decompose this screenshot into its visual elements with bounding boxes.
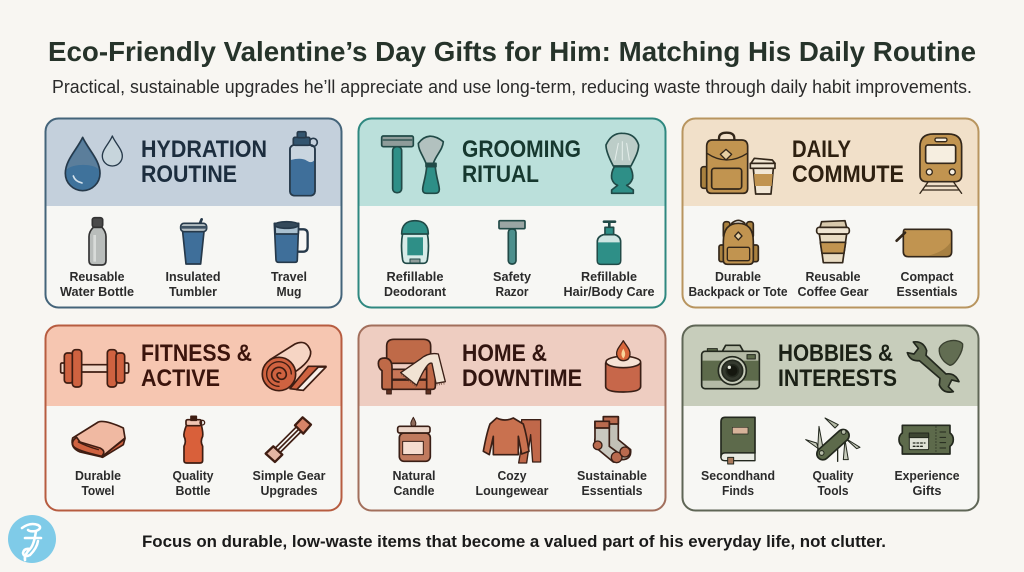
- item labels: home: Natural: [392, 468, 436, 483]
- icon: water drops: [65, 136, 122, 191]
- heading: hobbies and interests: INTERESTS: [778, 365, 897, 392]
- item labels: grooming: [384, 269, 654, 299]
- item labels: grooming: Razor: [496, 284, 528, 299]
- heading: grooming ritual: GROOMING: [462, 136, 581, 163]
- icon: coffee cup: [817, 221, 849, 263]
- panel header: hobbies: [683, 326, 978, 406]
- icon: wrench and pick: [907, 340, 963, 392]
- icon: shaving brush: [606, 133, 639, 193]
- icon: backpack and cup: [701, 133, 775, 194]
- item labels: commute: Backpack or Tote: [688, 284, 788, 299]
- icon: lit candle: [606, 341, 641, 392]
- icon: pouch: [897, 229, 952, 257]
- icon: small backpack: [719, 220, 758, 264]
- item labels: home: Candle: [394, 483, 434, 498]
- item labels: hydration: Insulated: [166, 269, 220, 284]
- item labels: grooming: Refillable: [581, 269, 637, 284]
- icon: rolled mat: [262, 342, 326, 391]
- item labels: fitness: Quality: [172, 468, 214, 483]
- item labels: home: Sustainable: [577, 468, 647, 483]
- item labels: hydration: Water Bottle: [60, 284, 134, 299]
- item labels: hydration: Reusable: [70, 269, 124, 284]
- panel header: home: [359, 326, 665, 406]
- item labels: commute: Reusable: [806, 269, 860, 284]
- icon: book: [721, 417, 755, 464]
- icon: socks: [593, 417, 631, 463]
- subtitle: Practical, sustainable upgrades he’ll appreciate and use long-term, reducing waste through daily habit improvements.: [52, 77, 972, 97]
- panel: fitness and active: [45, 325, 342, 511]
- heading: hobbies and interests: HOBBIES &: [778, 340, 893, 367]
- logo badge: [8, 515, 56, 563]
- icon: reusable water bottle: [89, 218, 106, 265]
- panel: grooming ritual: [358, 118, 666, 308]
- icon: refillable deodorant: [402, 221, 428, 263]
- heading: fitness and active: ACTIVE: [141, 365, 220, 392]
- heading: home and downtime: [462, 340, 582, 392]
- icon: experience ticket: [899, 425, 953, 454]
- item labels: hobbies: Secondhand: [701, 468, 775, 483]
- panel header: commute: [683, 119, 978, 206]
- item labels: grooming: Safety: [493, 269, 532, 284]
- item labels: hydration: Tumbler: [169, 284, 217, 299]
- panel header: grooming: [359, 119, 665, 206]
- panel: hydration routine: [45, 118, 342, 308]
- icon: armchair with throw: [378, 339, 445, 394]
- footer note: Focus on durable, low-waste items that become a valued part of his everyday life, not clutter.: [142, 532, 886, 551]
- item labels: commute: [688, 269, 958, 299]
- heading: hydration routine: ROUTINE: [141, 161, 237, 188]
- heading: daily commute: DAILY: [792, 136, 851, 163]
- icon: loungewear: [483, 418, 541, 463]
- icon: dumbbell: [61, 350, 129, 387]
- item labels: hobbies: Tools: [818, 483, 848, 498]
- item labels: home: Loungewear: [476, 483, 548, 498]
- item labels: fitness: Durable: [75, 468, 121, 483]
- item labels: commute: Compact: [900, 269, 954, 284]
- item labels: fitness: Simple Gear: [252, 468, 326, 483]
- heading: home and downtime: DOWNTIME: [462, 365, 582, 392]
- item labels: grooming: Deodorant: [384, 284, 447, 299]
- icon: resistance gear: [266, 417, 311, 462]
- item labels: fitness: Upgrades: [260, 483, 318, 498]
- panel: hobbies and interests: [682, 325, 979, 511]
- item labels: home: [392, 468, 647, 498]
- heading: hobbies and interests: [778, 340, 897, 392]
- item labels: commute: Essentials: [896, 284, 958, 299]
- item labels: fitness: [75, 468, 326, 498]
- item labels: hobbies: Quality: [812, 468, 854, 483]
- panel: daily commute: [682, 118, 979, 308]
- item labels: home: Cozy: [498, 468, 527, 483]
- title: Eco-Friendly Valentine’s Day Gifts for Him: Matching His Daily Routine: [48, 36, 976, 67]
- icon: travel mug: [274, 222, 308, 262]
- item labels: fitness: Towel: [82, 483, 114, 498]
- icon: train: [920, 134, 962, 193]
- item labels: hobbies: Experience: [894, 468, 960, 483]
- icon: large water bottle: [290, 132, 317, 196]
- icon: folded towel: [72, 421, 125, 457]
- item labels: commute: Durable: [715, 269, 761, 284]
- heading: grooming ritual: [462, 136, 581, 188]
- item labels: grooming: Hair/Body Care: [564, 284, 654, 299]
- item labels: hydration: Travel: [271, 269, 307, 284]
- item labels: hobbies: Finds: [722, 483, 754, 498]
- icon: safety razor: [499, 221, 525, 264]
- icon: razor and brush: [382, 136, 443, 193]
- item labels: hobbies: Gifts: [912, 483, 942, 498]
- heading: daily commute: [792, 136, 904, 188]
- item labels: grooming: Refillable: [386, 269, 444, 284]
- heading: hydration routine: [141, 136, 267, 188]
- icon: insulated tumbler: [181, 219, 207, 264]
- heading: fitness and active: FITNESS &: [141, 340, 252, 367]
- item labels: hobbies: [701, 468, 960, 498]
- item labels: hydration: [60, 269, 307, 299]
- icon: camera: [702, 345, 759, 389]
- heading: daily commute: COMMUTE: [792, 161, 904, 188]
- heading: fitness and active: [141, 340, 252, 392]
- item labels: hydration: Mug: [276, 284, 302, 299]
- panel header: hydration: [46, 119, 341, 206]
- icon: sports bottle: [184, 416, 205, 463]
- panel header: fitness: [46, 326, 341, 406]
- item labels: fitness: Bottle: [176, 483, 210, 498]
- icon: multi-tool: [806, 418, 860, 462]
- heading: grooming ritual: RITUAL: [462, 161, 539, 188]
- heading: hydration routine: HYDRATION: [141, 136, 267, 163]
- item labels: home: Essentials: [582, 483, 642, 498]
- icon: candle jar: [398, 417, 430, 461]
- panel: home and downtime: [358, 325, 666, 511]
- item labels: commute: Coffee Gear: [798, 284, 868, 299]
- heading: home and downtime: HOME &: [462, 340, 547, 367]
- icon: pump bottle: [597, 222, 621, 264]
